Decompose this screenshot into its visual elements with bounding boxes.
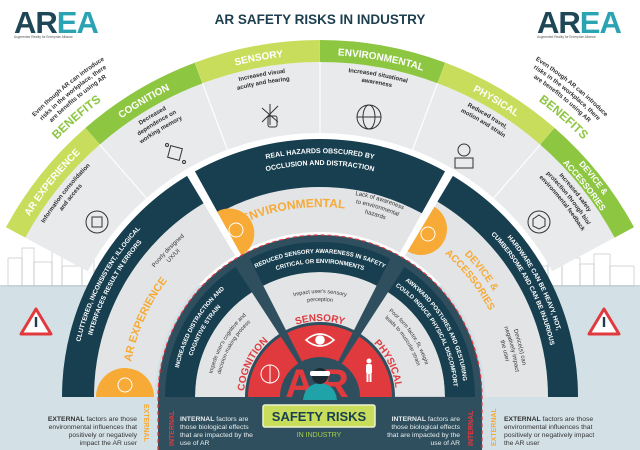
text: external right: the AR user bbox=[504, 440, 540, 447]
benefit dividers bbox=[100, 62, 540, 198]
benefits note left: are benefits to using AR bbox=[50, 74, 106, 122]
internal texts: PHYSICAL bbox=[372, 338, 403, 388]
green ring labels: SENSORY bbox=[234, 50, 282, 66]
title: AR SAFETY RISKS IN INDUSTRY bbox=[215, 12, 425, 27]
label: external right: EXTERNAL bbox=[491, 408, 498, 446]
icon: device bbox=[528, 211, 550, 233]
text: external left: positively or negatively bbox=[69, 432, 138, 439]
external texts: Lack of awareness bbox=[356, 191, 404, 210]
orange tab left bbox=[96, 368, 154, 397]
label: internal right: INTERNAL bbox=[468, 410, 475, 446]
internal texts: CRITICAL OR ENVIRONMENTS bbox=[275, 259, 365, 272]
external texts: AR EXPERIENCE bbox=[124, 276, 167, 362]
internal sector: physical bbox=[126, 203, 514, 450]
text: external right bbox=[504, 416, 594, 447]
panel: external AR experience bbox=[78, 155, 562, 450]
external texts: Poorly designed bbox=[152, 234, 184, 268]
benefits note right: are benefits to using AR bbox=[534, 76, 591, 122]
text: internal left bbox=[180, 416, 253, 447]
green ring labels: DEVICE & bbox=[579, 160, 607, 196]
city sketch left bbox=[0, 248, 150, 286]
external texts: ACCESSORIES bbox=[443, 248, 497, 312]
logo right: AREA bbox=[537, 5, 621, 40]
text: internal left: use of AR bbox=[180, 440, 210, 447]
text: internal left: INTERNAL factors are bbox=[180, 416, 249, 423]
internal texts: Impact user's sensory bbox=[293, 289, 348, 298]
benefit icons bbox=[86, 104, 550, 233]
green ring labels: PHYSICAL bbox=[473, 85, 517, 117]
text: external left: environmental influences that bbox=[49, 424, 137, 431]
external texts: UX/UI bbox=[166, 248, 180, 262]
text: internal right: those biological effects bbox=[391, 424, 461, 431]
internal texts: AWKWARD POSTURES AND GESTURING bbox=[404, 278, 467, 382]
benefit descriptions: protection through bio/ bbox=[546, 172, 591, 224]
city sketch right bbox=[490, 248, 640, 286]
external texts: hazards bbox=[365, 209, 386, 220]
benefit descriptions: environmental feedback bbox=[540, 176, 584, 232]
internal texts: COULD INDUCE PHYSICAL DISCOMFORT bbox=[394, 283, 458, 387]
internal texts: perception bbox=[307, 297, 333, 304]
icon: consolidation bbox=[86, 211, 108, 233]
external texts: CUMBERSOME AND CAN BE INJURIOUS bbox=[490, 231, 555, 347]
benefit descriptions: dependence on bbox=[138, 110, 176, 136]
benefits note right: risks in the workplace, there bbox=[534, 66, 600, 120]
text: external right: environmental influences that bbox=[504, 424, 593, 431]
benefits note right: BENEFITS bbox=[539, 94, 588, 138]
external texts: HARDWARE CAN BE HEAVY, HOT, bbox=[506, 234, 562, 331]
benefit descriptions: Increased visual bbox=[238, 68, 285, 81]
benefit descriptions: awareness bbox=[362, 78, 392, 87]
label: external left: EXTERNAL bbox=[142, 404, 149, 442]
benefit descriptions bbox=[40, 68, 591, 232]
safety risks box: SAFETY RISKS bbox=[272, 409, 367, 424]
panel: internal bbox=[158, 235, 482, 450]
text: internal right bbox=[387, 416, 461, 447]
green ring labels: AR EXPERIENCE bbox=[25, 148, 80, 216]
benefits note left: risks in the workplace, there bbox=[40, 66, 106, 120]
benefit descriptions: Reduced travel, bbox=[468, 102, 506, 130]
external texts: ENVIRONMENTAL bbox=[244, 198, 345, 220]
orange tab environmental bbox=[217, 208, 254, 255]
icon: globe 360 bbox=[357, 105, 381, 129]
icon: cube bbox=[166, 144, 186, 164]
internal texts: SENSORY bbox=[294, 313, 346, 328]
icon: hand bbox=[262, 104, 278, 127]
internal texts: leads to muscular strain bbox=[383, 315, 421, 367]
text: internal right: that are impacted by the bbox=[387, 432, 460, 439]
benefit descriptions: working memory bbox=[140, 116, 182, 144]
text: external left: EXTERNAL factors are those bbox=[48, 416, 137, 423]
internal texts bbox=[174, 248, 467, 390]
external texts: negatively impact bbox=[502, 326, 519, 373]
green ring labels: COGNITION bbox=[118, 84, 170, 118]
green ring labels bbox=[25, 48, 607, 216]
internal texts: COGNITIVE STRAIN bbox=[189, 304, 222, 357]
benefit descriptions: acuity and hearing bbox=[237, 77, 290, 90]
benefit descriptions: motion and strain bbox=[460, 109, 505, 138]
internal texts: Impede user's cognitive and bbox=[209, 312, 248, 374]
green ring labels: ACCESSORIES bbox=[562, 160, 606, 210]
benefit descriptions: Increased safety bbox=[559, 172, 591, 212]
logo left: Augmented Reality for Enterprise Alliance bbox=[14, 35, 73, 39]
external texts: DEVICE & bbox=[462, 249, 500, 293]
text: external left bbox=[48, 416, 138, 447]
external texts: INTERFACES RESULT IN ERRORS bbox=[88, 240, 142, 336]
orange tab device bbox=[408, 207, 447, 255]
safety risks box bbox=[263, 405, 375, 439]
icon: eye bbox=[306, 334, 334, 346]
external texts: OCCLUSION AND DISTRACTION bbox=[266, 160, 374, 172]
external texts: REAL HAZARDS OBSCURED BY bbox=[266, 148, 375, 159]
text: internal left: that are impacted by the bbox=[180, 432, 253, 439]
internal texts: Poor form factor, fit, weight bbox=[387, 308, 429, 366]
warning icon right bbox=[589, 309, 619, 334]
external texts: Device(s) can bbox=[512, 328, 526, 366]
text: external left: impact the AR user bbox=[80, 440, 138, 447]
benefit descriptions: Decreased bbox=[138, 106, 166, 125]
benefit descriptions: Information consolidation bbox=[40, 164, 90, 223]
external texts bbox=[76, 148, 561, 372]
external texts: to environmental bbox=[356, 200, 400, 216]
icon: brain bbox=[261, 365, 279, 383]
center AR with user: AR bbox=[285, 362, 355, 406]
text: external right: EXTERNAL factors are those bbox=[504, 416, 593, 423]
icon: body bbox=[366, 358, 372, 382]
internal texts: INCREASED DISTRACTION AND bbox=[175, 286, 226, 368]
warning icon left bbox=[21, 309, 51, 334]
benefits note left: BENEFITS bbox=[52, 96, 100, 140]
benefits note left: Even though AR can introduce bbox=[32, 58, 104, 116]
internal sector: sensory bbox=[132, 209, 508, 450]
green ring labels: ENVIRONMENTAL bbox=[338, 48, 423, 71]
benefit descriptions: and access bbox=[60, 184, 82, 211]
benefit descriptions: Increased situational bbox=[348, 68, 408, 83]
internal texts: COGNITION bbox=[236, 335, 271, 391]
text: internal right: INTERNAL factors are bbox=[392, 416, 460, 423]
internal texts: decision-making process bbox=[217, 319, 252, 375]
icon: VR person bbox=[455, 144, 473, 168]
text: internal right: use of AR bbox=[431, 440, 460, 447]
internal sector: cognition bbox=[180, 257, 460, 450]
internal texts: REDUCED SENSORY AWARENESS IN SAFETY bbox=[254, 249, 386, 270]
external texts: the user bbox=[499, 340, 510, 362]
logo right: Augmented Reality for Enterprise Alliance bbox=[537, 35, 596, 39]
benefits note right: Even though AR can introduce bbox=[536, 56, 608, 116]
text: external right: positively or negatively impact bbox=[504, 432, 594, 439]
label: internal left: INTERNAL bbox=[169, 410, 176, 446]
text: internal left: those biological effects bbox=[180, 424, 249, 431]
logo left: AREA bbox=[14, 5, 98, 40]
safety risks box: IN INDUSTRY bbox=[297, 432, 342, 439]
external texts: CLUTTERED, INCONSISTENT, ILLOGICAL bbox=[76, 228, 140, 342]
